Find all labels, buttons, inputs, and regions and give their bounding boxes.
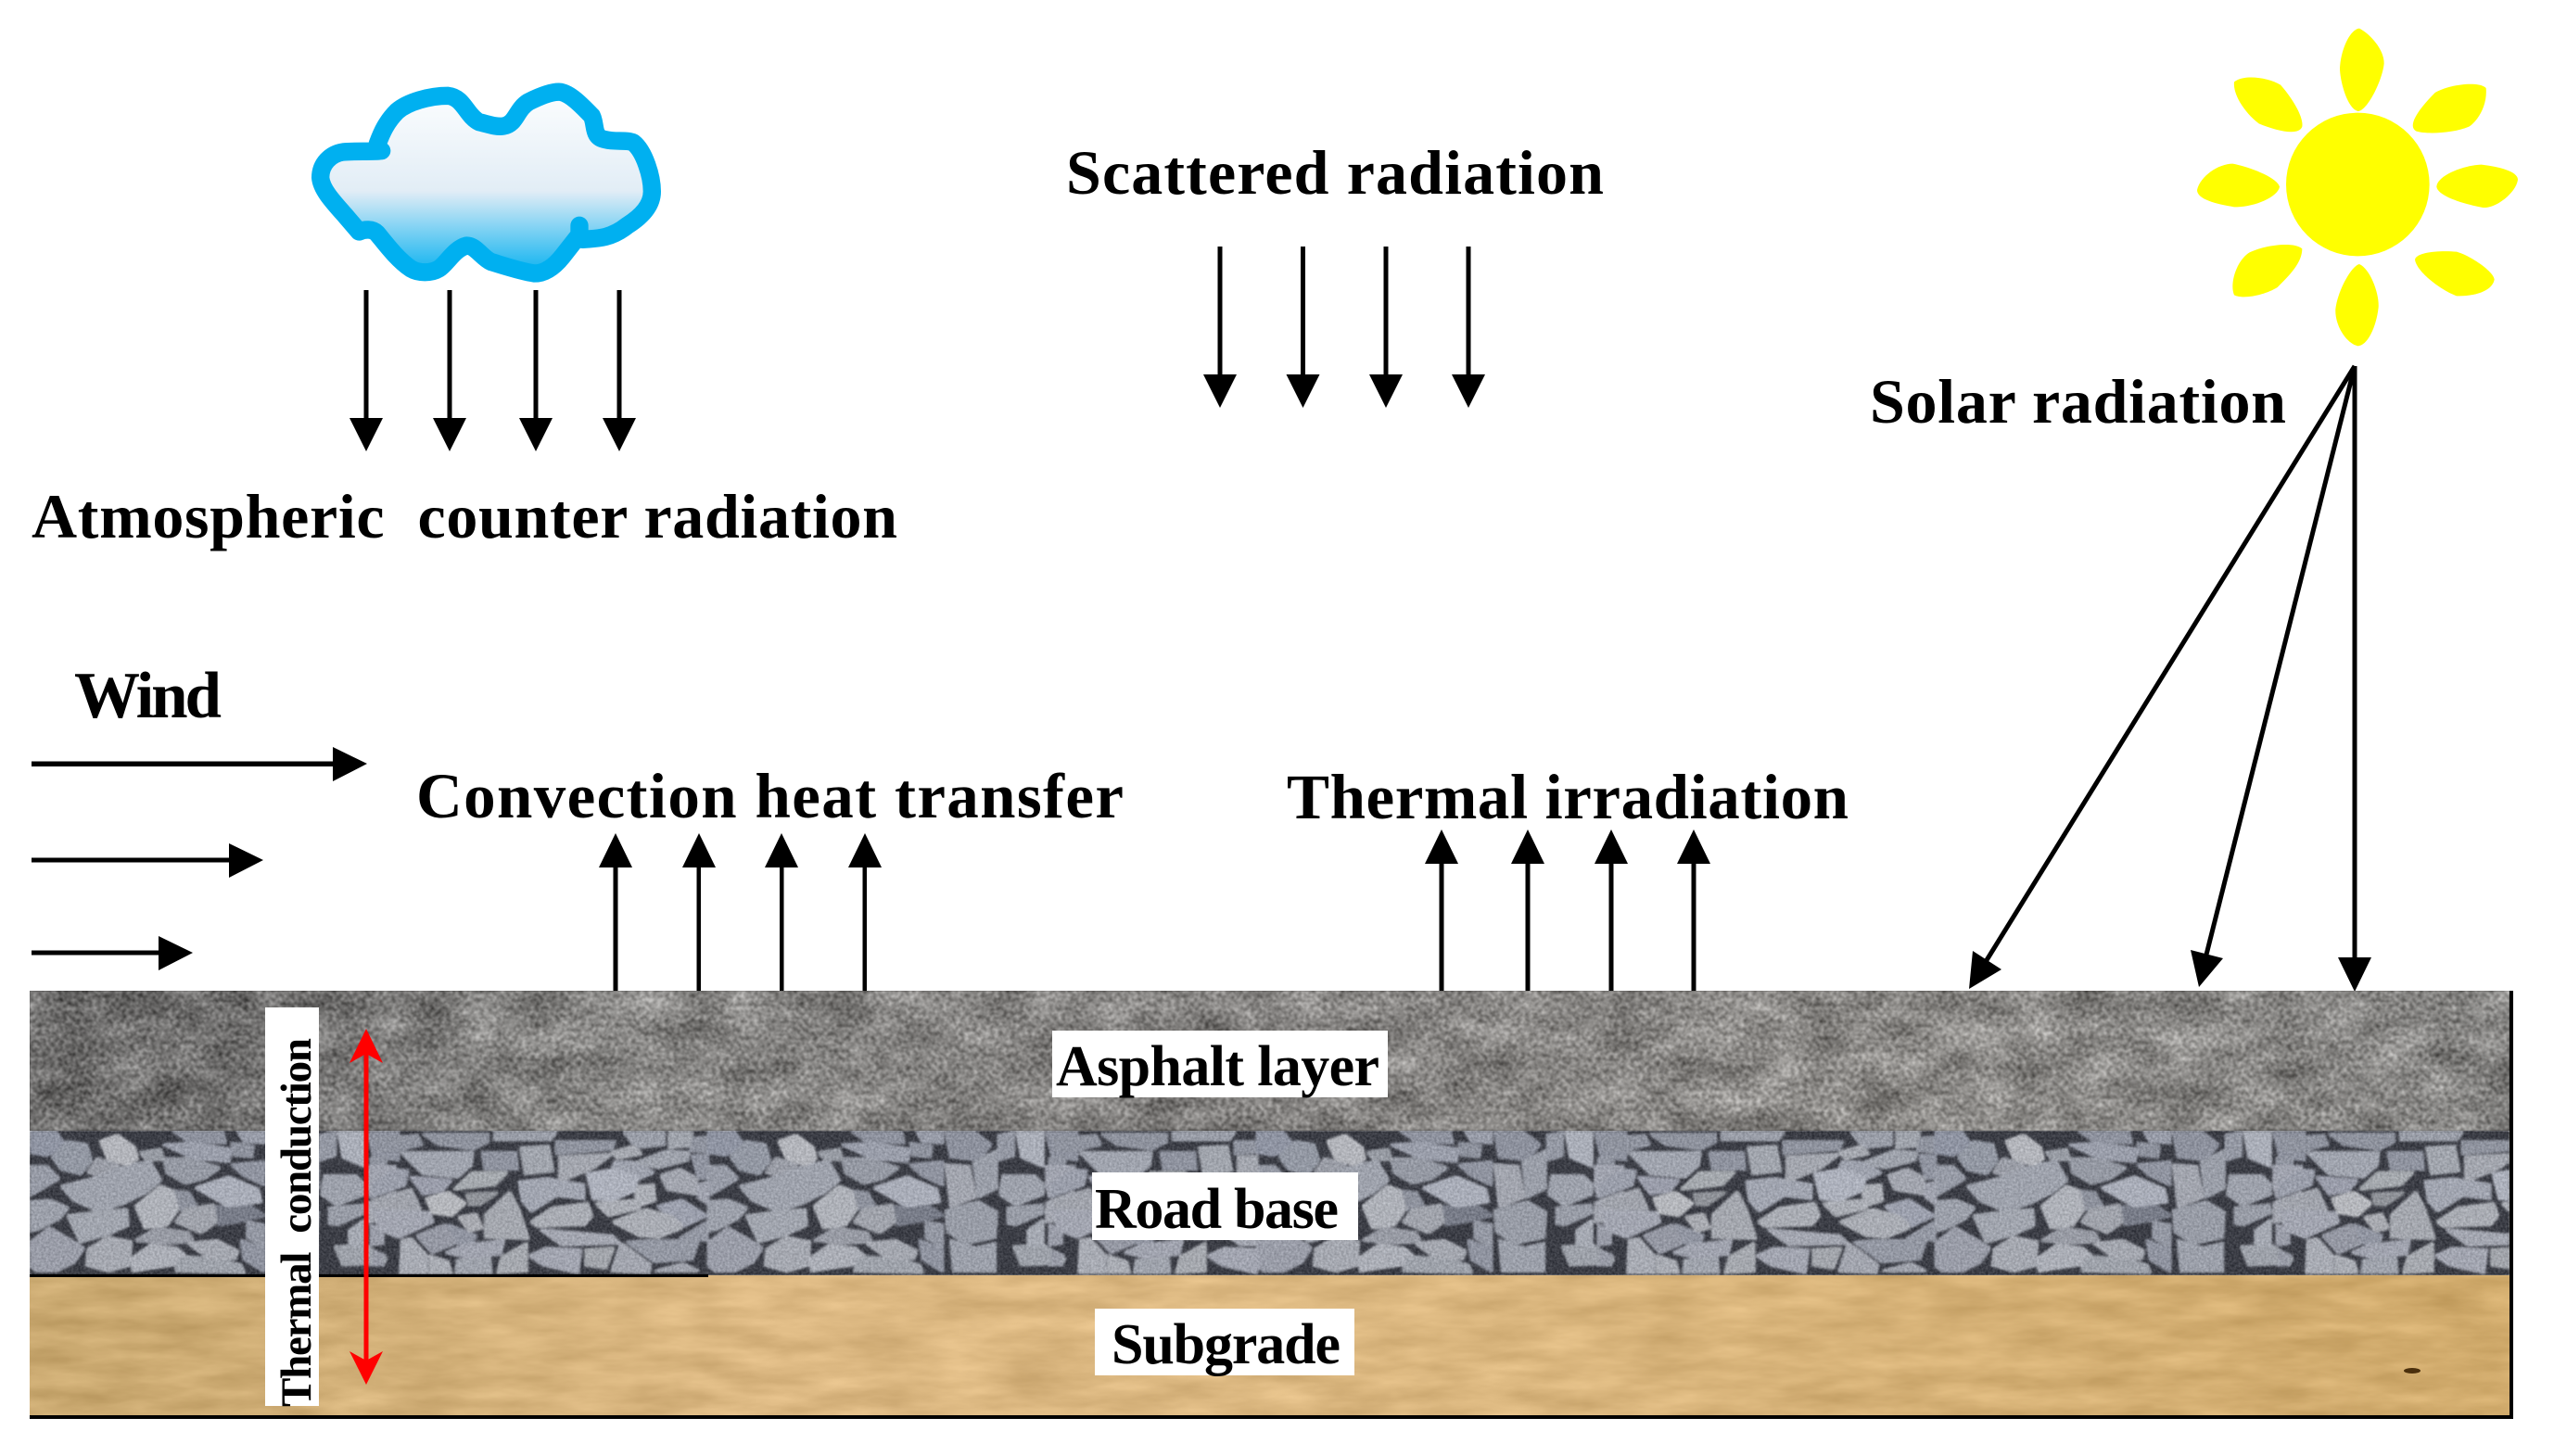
heading: wind: Wind xyxy=(74,660,222,732)
icon: sun xyxy=(2197,29,2518,346)
arrows: atmospheric counter radiation xyxy=(349,290,636,451)
label: subgrade: Subgrade xyxy=(1112,1313,1341,1376)
arrows: convection heat transfer xyxy=(599,833,882,994)
arrows: wind xyxy=(32,747,367,970)
arrows: solar radiation xyxy=(1969,366,2371,992)
arrows: scattered radiation xyxy=(1203,247,1485,408)
label: asphalt layer: Asphalt layer xyxy=(1056,1035,1379,1098)
panel: pavement cross-section xyxy=(30,991,2513,1419)
label: thermal conduction: Thermal conduction xyxy=(273,1038,321,1407)
arrow: thermal conduction double-headed xyxy=(349,1029,383,1385)
layer: subgrade soil xyxy=(30,1275,2510,1415)
layer: asphalt xyxy=(30,991,2510,1131)
heading: thermal irradiation: Thermal irradiation xyxy=(1287,762,1849,832)
label: road base: Road base xyxy=(1095,1178,1339,1241)
layer: road base stones xyxy=(30,1131,2510,1275)
arrows: thermal irradiation xyxy=(1425,829,1710,992)
icon: cloud xyxy=(321,92,652,273)
heading: atmospheric counter radiation: Atmospheric counter radiation xyxy=(32,481,897,551)
heading: convection heat transfer: Convection heat transfer xyxy=(416,761,1124,831)
heading: scattered radiation: Scattered radiation xyxy=(1066,137,1604,208)
heading: solar radiation: Solar radiation xyxy=(1870,366,2286,437)
